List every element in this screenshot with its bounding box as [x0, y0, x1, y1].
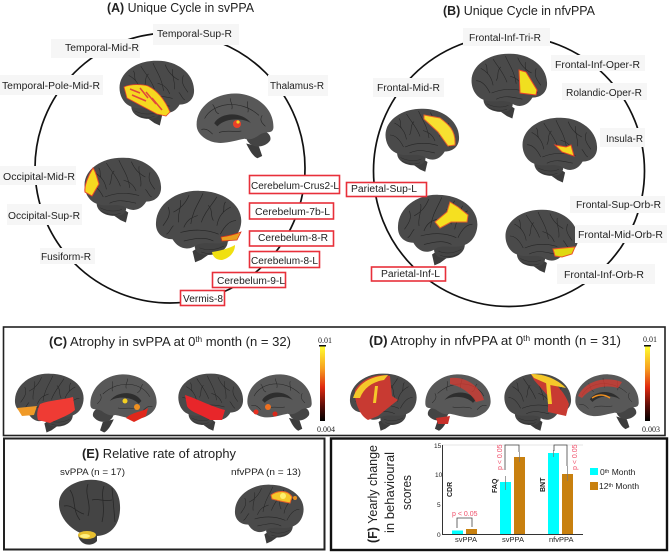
heading: panel F: in behavioural: [382, 452, 397, 533]
legend: 12: [599, 481, 608, 491]
label: Temporal-Pole-Mid-R: Temporal-Pole-Mid-R: [2, 81, 100, 92]
bars: FAQ svPPA: [500, 457, 525, 534]
significance labels: p < 0.05: [572, 444, 579, 470]
brain: D medial right: [425, 374, 491, 431]
rotated measure labels: BNT: [540, 477, 547, 492]
heading: panel D: th: [523, 334, 530, 343]
brain: E svPPA posterior view: [59, 480, 120, 545]
brain: E nfvPPA lateral: [235, 485, 304, 544]
brain: C lateral left: [178, 374, 243, 431]
label: Parietal-Sup-L: Parietal-Sup-L: [351, 184, 417, 195]
label: Temporal-Sup-R: [153, 24, 239, 45]
label: Insula-R: Insula-R: [606, 134, 643, 145]
colorbar: C: 0.01: [318, 336, 332, 345]
brain: Occipital regions: [85, 158, 161, 222]
label: Occipital-Sup-R: Occipital-Sup-R: [8, 211, 80, 222]
significance labels: [452, 444, 579, 518]
label: Cerebelum-8-L: Cerebelum-8-L: [251, 256, 318, 267]
brain: Frontal-Inf-Tri/Oper regions: [472, 54, 547, 118]
bars: BNT nfvPPA: [548, 453, 573, 534]
category labels: [455, 535, 573, 544]
colorbar: C: 0.004: [317, 425, 335, 434]
label: Vermis-8: Vermis-8: [183, 294, 223, 305]
label: Cerebelum-9-L: Cerebelum-9-L: [217, 276, 285, 287]
label: Cerebelum-Crus2-L: [250, 176, 340, 194]
label: Cerebelum-9-L: [212, 272, 286, 288]
label: Frontal-Mid-Orb-R: [575, 225, 667, 243]
brain: C medial right: [90, 374, 157, 432]
legend: Month: [613, 481, 639, 491]
heading: panel C: th: [195, 335, 202, 344]
bar chart: behavioural scores: 0: [437, 532, 441, 539]
axis ticks: 15: [434, 443, 442, 450]
label: Frontal-Inf-Tri-R: Frontal-Inf-Tri-R: [469, 33, 541, 44]
label: Occipital-Mid-R: [0, 166, 76, 185]
label: Cerebelum-Crus2-L: Cerebelum-Crus2-L: [251, 181, 339, 192]
label: Cerebelum-8-L: [250, 252, 320, 268]
brain: Insula region: [523, 118, 597, 182]
brain: D lateral right: [350, 374, 417, 431]
label: Temporal-Mid-R: [51, 39, 140, 58]
label: Cerebelum-8-R: [250, 231, 334, 246]
heading: panel F: [365, 445, 414, 543]
label: Rolandic-Oper-R: [562, 83, 647, 100]
label: Temporal-Mid-R: Temporal-Mid-R: [65, 43, 139, 54]
label: Frontal-Inf-Orb-R: Frontal-Inf-Orb-R: [564, 270, 644, 281]
legend: th: [605, 469, 609, 475]
label: Frontal-Sup-Orb-R: Frontal-Sup-Orb-R: [576, 200, 661, 211]
heading: panel C: (C) Atrophy in svPPA at 0: [49, 334, 195, 349]
heading: panel C: month (n = 32): [202, 334, 291, 349]
heading: panel D: (D) Atrophy in nfvPPA at 0: [369, 333, 520, 348]
panel: atrophy C and D: [4, 327, 665, 436]
significance labels: p < 0.05: [452, 511, 478, 518]
label: Fusiform-R: Fusiform-R: [41, 252, 91, 263]
label: Parietal-Sup-L: [346, 182, 426, 196]
axes: [442, 445, 583, 534]
brain: Parietal regions: [398, 195, 477, 265]
colorbar: D: [642, 335, 660, 434]
colorbar: D: 0.003: [642, 425, 660, 434]
label: Fusiform-R: [40, 248, 95, 264]
label: Frontal-Inf-Orb-R: [557, 264, 655, 284]
panel: behavioural scores F: [331, 438, 667, 550]
label: Frontal-Inf-Oper-R: Frontal-Inf-Oper-R: [555, 60, 640, 71]
label: Occipital-Mid-R: Occipital-Mid-R: [3, 172, 75, 183]
label: Occipital-Sup-R: [7, 204, 82, 225]
bar chart: behavioural scores: [434, 443, 583, 544]
label: Thalamus-R: [268, 75, 328, 96]
circle: nfvPPA cycle: [374, 36, 644, 306]
rotated measure labels: [447, 477, 547, 497]
label: Parietal-Inf-L: [372, 267, 446, 281]
brain: C lateral right: [15, 374, 84, 432]
label: Cerebelum-7b-L: [250, 203, 334, 219]
label: Insula-R: [600, 128, 645, 147]
heading: panel F: scores: [399, 475, 414, 510]
label: Frontal-Inf-Tri-R: [463, 28, 550, 46]
bar chart: behavioural scores: 5: [437, 502, 441, 509]
rotated measure labels: CDR: [447, 482, 454, 497]
heading: panel D: month (n = 31): [530, 333, 621, 348]
circle: svPPA cycle: [35, 33, 305, 303]
label: Vermis-8: [180, 290, 224, 306]
brain: Temporal regions: [120, 61, 194, 125]
label: nfvPPA group: nfvPPA (n = 13): [231, 467, 301, 477]
brain: D medial left: [575, 374, 639, 429]
label: Cerebelum-7b-L: Cerebelum-7b-L: [255, 207, 330, 218]
heading: panel F: (F) Yearly change: [365, 445, 380, 543]
brain: Cerebellum regions: [156, 191, 241, 262]
error bars and brackets: [506, 450, 568, 490]
category labels: svPPA: [455, 535, 477, 544]
bar chart: behavioural scores: 10: [435, 472, 443, 479]
title: panel A: (A) Unique Cycle in svPPA: [107, 0, 254, 15]
label: Frontal-Sup-Orb-R: [570, 196, 665, 213]
brain: Thalamus medial: [197, 94, 273, 158]
significance labels: p < 0.05: [497, 444, 504, 470]
title: panel B: (B) Unique Cycle in nfvPPA: [443, 3, 595, 18]
label: Temporal-Pole-Mid-R: [0, 75, 103, 95]
legend: 0: [600, 467, 605, 477]
brain: D lateral left: [504, 374, 571, 431]
legend: Month: [609, 467, 636, 477]
label: Rolandic-Oper-R: Rolandic-Oper-R: [566, 88, 642, 99]
heading: panel E: (E) Relative rate of atrophy: [82, 446, 236, 461]
brain: Orbital regions: [505, 210, 578, 273]
brain: C medial left: [247, 374, 312, 431]
category labels: svPPA: [502, 535, 524, 544]
category labels: nfvPPA: [549, 535, 573, 544]
label: Parietal-Inf-L: Parietal-Inf-L: [381, 269, 440, 280]
label: Frontal-Inf-Oper-R: [551, 55, 645, 71]
brain: Frontal-Mid region: [386, 109, 459, 172]
label: Frontal-Mid-R: Frontal-Mid-R: [377, 83, 440, 94]
label: Temporal-Sup-R: Temporal-Sup-R: [157, 29, 232, 40]
label: svPPA group: svPPA (n = 17): [60, 467, 125, 477]
label: Thalamus-R: Thalamus-R: [270, 81, 324, 92]
legend: th: [608, 483, 613, 489]
rotated measure labels: FAQ: [492, 478, 499, 493]
label: Frontal-Mid-R: [373, 78, 444, 97]
label: Frontal-Mid-Orb-R: Frontal-Mid-Orb-R: [578, 230, 663, 241]
colorbar: C: [317, 336, 335, 434]
legend: [590, 467, 639, 491]
label: Cerebelum-8-R: Cerebelum-8-R: [258, 233, 328, 244]
bars: CDR svPPA: [452, 529, 477, 534]
colorbar: D: 0.01: [643, 335, 657, 344]
panel: relative rate E: [4, 438, 324, 550]
